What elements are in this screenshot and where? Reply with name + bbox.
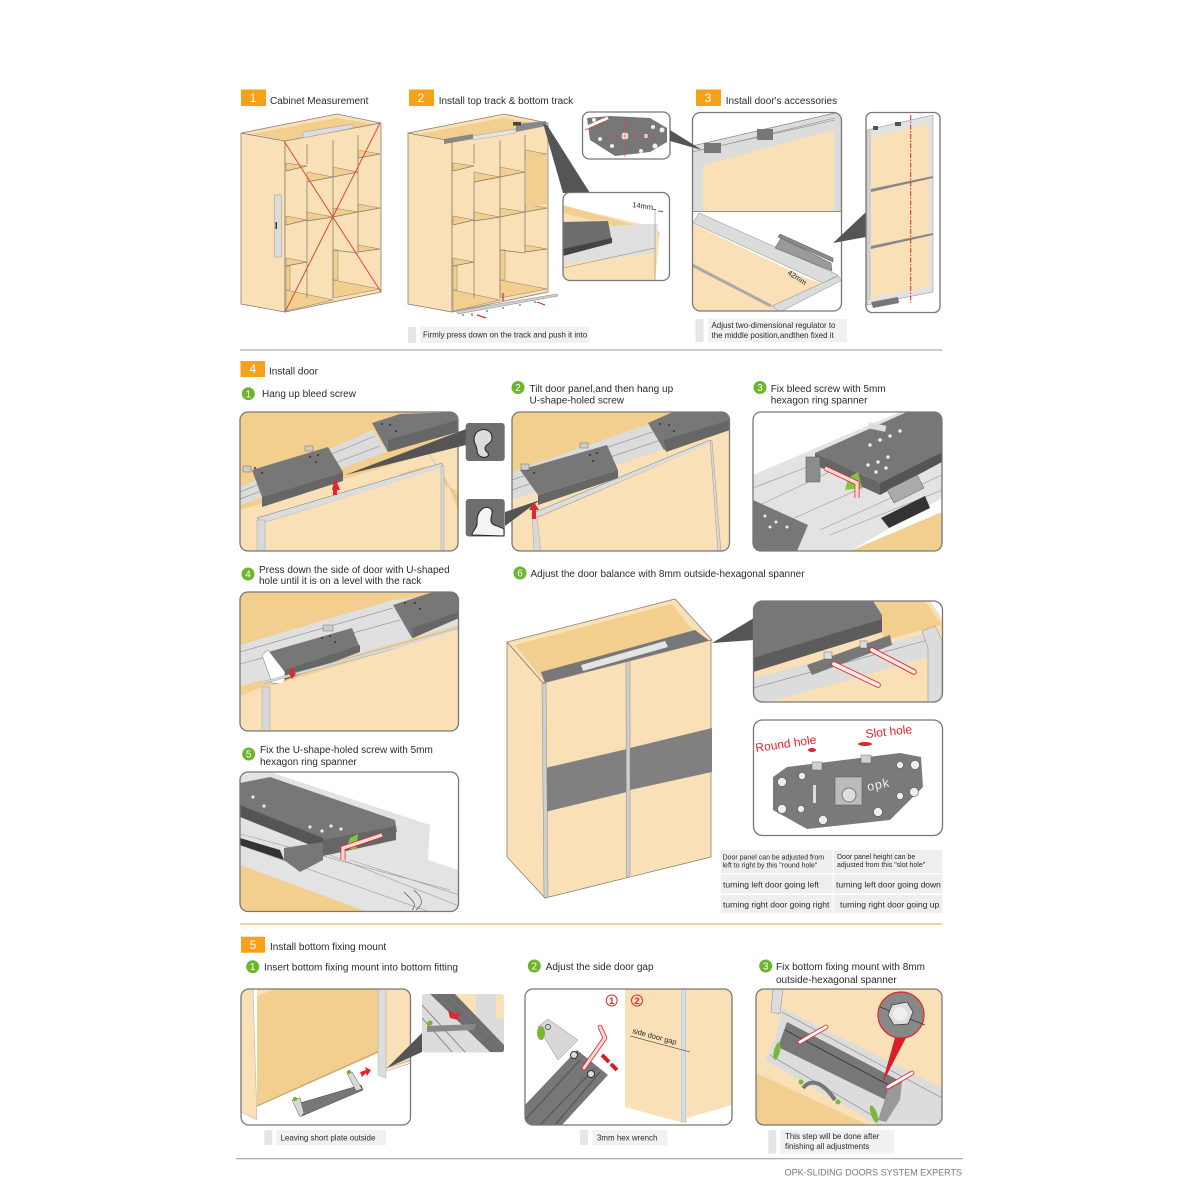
caption: done after all adjustments	[768, 1130, 894, 1154]
heading: install top and bottom track: Install top track & bottom track	[439, 96, 574, 107]
step 5.1 label: Insert bottom fixing mount into bottom fitting	[264, 962, 458, 974]
section 4: install door	[240, 361, 943, 913]
step 4.2 label: U-shape-holed screw	[530, 396, 625, 406]
step 4.4 label: 4	[245, 570, 251, 580]
detail panel: adjusting with wrenches	[753, 601, 943, 702]
detail panel: door with upper and lower fittings	[692, 112, 842, 312]
step 5.3 label: Fix bottom fixing mount with 8mm	[776, 962, 925, 973]
label: slot hole: Slot hole	[865, 722, 913, 741]
step 4.5 label: hexagon ring spanner	[260, 757, 357, 768]
section 2: install tracks	[408, 90, 670, 343]
step 4.6 label: Adjust the door balance with 8mm outside-hexagonal spanner	[530, 569, 805, 580]
step number 4	[240, 361, 265, 377]
callout wedge to full door	[833, 212, 866, 243]
step 4.2 label: Tilt door panel,and then hang up	[530, 384, 674, 395]
step 5.1 label: 1	[250, 962, 256, 973]
wardrobe with two sliding doors	[507, 599, 712, 898]
step 4.2 label: 2	[515, 383, 521, 394]
callout wedge to bleed hole magnifier	[345, 429, 466, 475]
step 4.5 label: Fix the U-shape-holed screw with 5mm	[260, 745, 433, 756]
dimension label: 42mm: 42mm	[786, 268, 808, 287]
circled numbers 1 and 2: 2	[634, 996, 640, 1007]
step number 4: 4	[250, 362, 257, 376]
step 4.1 label	[242, 387, 357, 400]
adjustment table: adjusted from this "slot hole"	[837, 862, 926, 869]
caption: done after all adjustments: finishing all adjustments	[785, 1142, 869, 1151]
step 4.2 label	[512, 381, 674, 406]
red insert arrow	[360, 1067, 371, 1077]
step 4.1 label: Hang up bleed screw	[262, 389, 357, 400]
section 3: door accessories	[582, 90, 940, 342]
step 5.2 label: Adjust the side door gap	[546, 962, 654, 973]
adjustment table: left to right by this "round hole"	[722, 862, 818, 870]
detail panel: round hole and slot hole plate	[754, 720, 942, 836]
footer brand line: OPK-SLIDING DOORS SYSTEM EXPERTS	[785, 1168, 962, 1178]
step 4.1 label: 1	[246, 389, 252, 400]
step 5.3 label	[759, 960, 925, 986]
panel 4.3: fix bleed screw	[753, 412, 942, 551]
heading: install door's accessories: Install door's accessories	[726, 96, 837, 107]
step number 2	[409, 90, 434, 106]
side door gap label: side door gap	[631, 1026, 678, 1047]
caption: 3mm hex wrench	[580, 1130, 667, 1145]
side door gap label	[630, 1026, 690, 1052]
z-shaped bracket	[775, 234, 833, 271]
step 5.2 label	[528, 960, 654, 973]
panel 5.2: side door gap	[525, 989, 732, 1125]
detail panel: 14mm track offset	[563, 192, 670, 281]
label: round hole: Round hole	[754, 733, 818, 755]
heading: install door: Install door	[269, 366, 319, 378]
adjustment table: turning right door going up	[840, 900, 940, 910]
step 4.4 label	[242, 565, 450, 587]
step 4.3 label: 3	[757, 383, 763, 394]
panel 4.1: hang up bleed screw	[240, 412, 458, 552]
inset: bottom fitting	[422, 994, 504, 1052]
step 5.3 label: 3	[763, 962, 769, 972]
callout wedge to U-shaped hole magnifier	[505, 500, 540, 526]
cabinet with tracks fitted	[408, 114, 558, 318]
adjustment table: turning left door going down	[836, 880, 941, 890]
step 4.6 label: 6	[517, 568, 523, 580]
step 5.2 label: 2	[532, 962, 538, 972]
caption: adjust regulator	[696, 319, 847, 342]
step number 3: 3	[705, 91, 712, 105]
magnifier: bleed screw hole	[466, 423, 505, 461]
step number 1	[241, 90, 266, 106]
caption: adjust regulator: Adjust two-dimensional regulator to	[712, 321, 836, 330]
adjustment table	[721, 850, 942, 913]
step 4.5 label	[242, 745, 433, 768]
caption: leaving short plate outside: Leaving short plate outside	[280, 1134, 376, 1142]
step number 5: 5	[250, 938, 257, 952]
detail panel: full door with centre line	[866, 112, 940, 312]
mounting plate	[773, 753, 923, 829]
panel 4.5: fix U-shape-holed screw	[240, 772, 459, 912]
adjustment table: Door panel can be adjusted from	[722, 854, 824, 862]
label: slot hole	[858, 722, 913, 746]
magnifier: hex bolt with red pointer	[878, 992, 925, 1084]
mounting plate: opk	[866, 775, 891, 794]
bottom track with red arrows	[456, 293, 558, 318]
dimension label: 14mm: 14mm	[632, 200, 654, 212]
caption: leaving short plate outside	[264, 1130, 386, 1145]
panel 4.4: press down door	[240, 592, 459, 731]
callout wedge from regulator plate	[670, 130, 702, 150]
callout wedge to bottom fitting inset	[387, 1033, 422, 1068]
heading: cabinet measurement: Cabinet Measurement	[270, 96, 369, 107]
step 4.3 label	[754, 381, 886, 406]
magnifier: U-shaped hole	[466, 499, 505, 536]
bottom fixing mount	[292, 1070, 363, 1117]
cabinet with measuring diagonals	[241, 114, 381, 312]
circled numbers 1 and 2	[606, 995, 642, 1007]
red up arrow on door post	[529, 502, 539, 519]
step 4.4 label: hole until it is on a level with the rack	[259, 576, 422, 587]
panel 5.1: insert bottom mount	[241, 989, 411, 1125]
step 4.4 label: Press down the side of door with U-shaped	[259, 565, 450, 576]
step 4.5 label: 5	[246, 750, 252, 760]
step number 5	[241, 937, 265, 953]
step number 3	[696, 90, 721, 106]
callout wedge to wrench detail	[712, 618, 754, 643]
caption: firmly press down: Firmly press down on the track and push it into	[423, 330, 588, 340]
caption: firmly press down	[408, 327, 590, 343]
caption: 3mm hex wrench: 3mm hex wrench	[597, 1134, 657, 1142]
caption: adjust regulator: the middle position,andthen fixed it	[712, 331, 835, 340]
circled numbers 1 and 2: 1	[609, 996, 615, 1007]
step number 2: 2	[418, 91, 425, 105]
section 1: cabinet measurement	[241, 90, 381, 312]
adjustment table: Door panel height can be	[837, 854, 915, 861]
step 5.3 label: outside-hexagonal spanner	[776, 975, 897, 986]
step number 1: 1	[250, 91, 257, 105]
adjustment table: turning right door going right	[723, 900, 830, 910]
panel 4.2: tilt door panel	[512, 412, 730, 552]
adjustment table: turning left door going left	[723, 880, 820, 890]
section 5: install bottom fixing mount	[241, 937, 942, 1154]
heading: install bottom fixing mount: Install bottom fixing mount	[270, 942, 386, 953]
caption: done after all adjustments: This step will be done after	[785, 1132, 880, 1141]
step 4.3 label: Fix bleed screw with 5mm	[771, 384, 886, 395]
step 4.3 label: hexagon ring spanner	[771, 396, 868, 406]
callout wedge to track detail	[543, 123, 590, 193]
panel 5.3: fix bottom mount	[756, 989, 942, 1125]
detail panel: regulator plate	[582, 112, 670, 159]
